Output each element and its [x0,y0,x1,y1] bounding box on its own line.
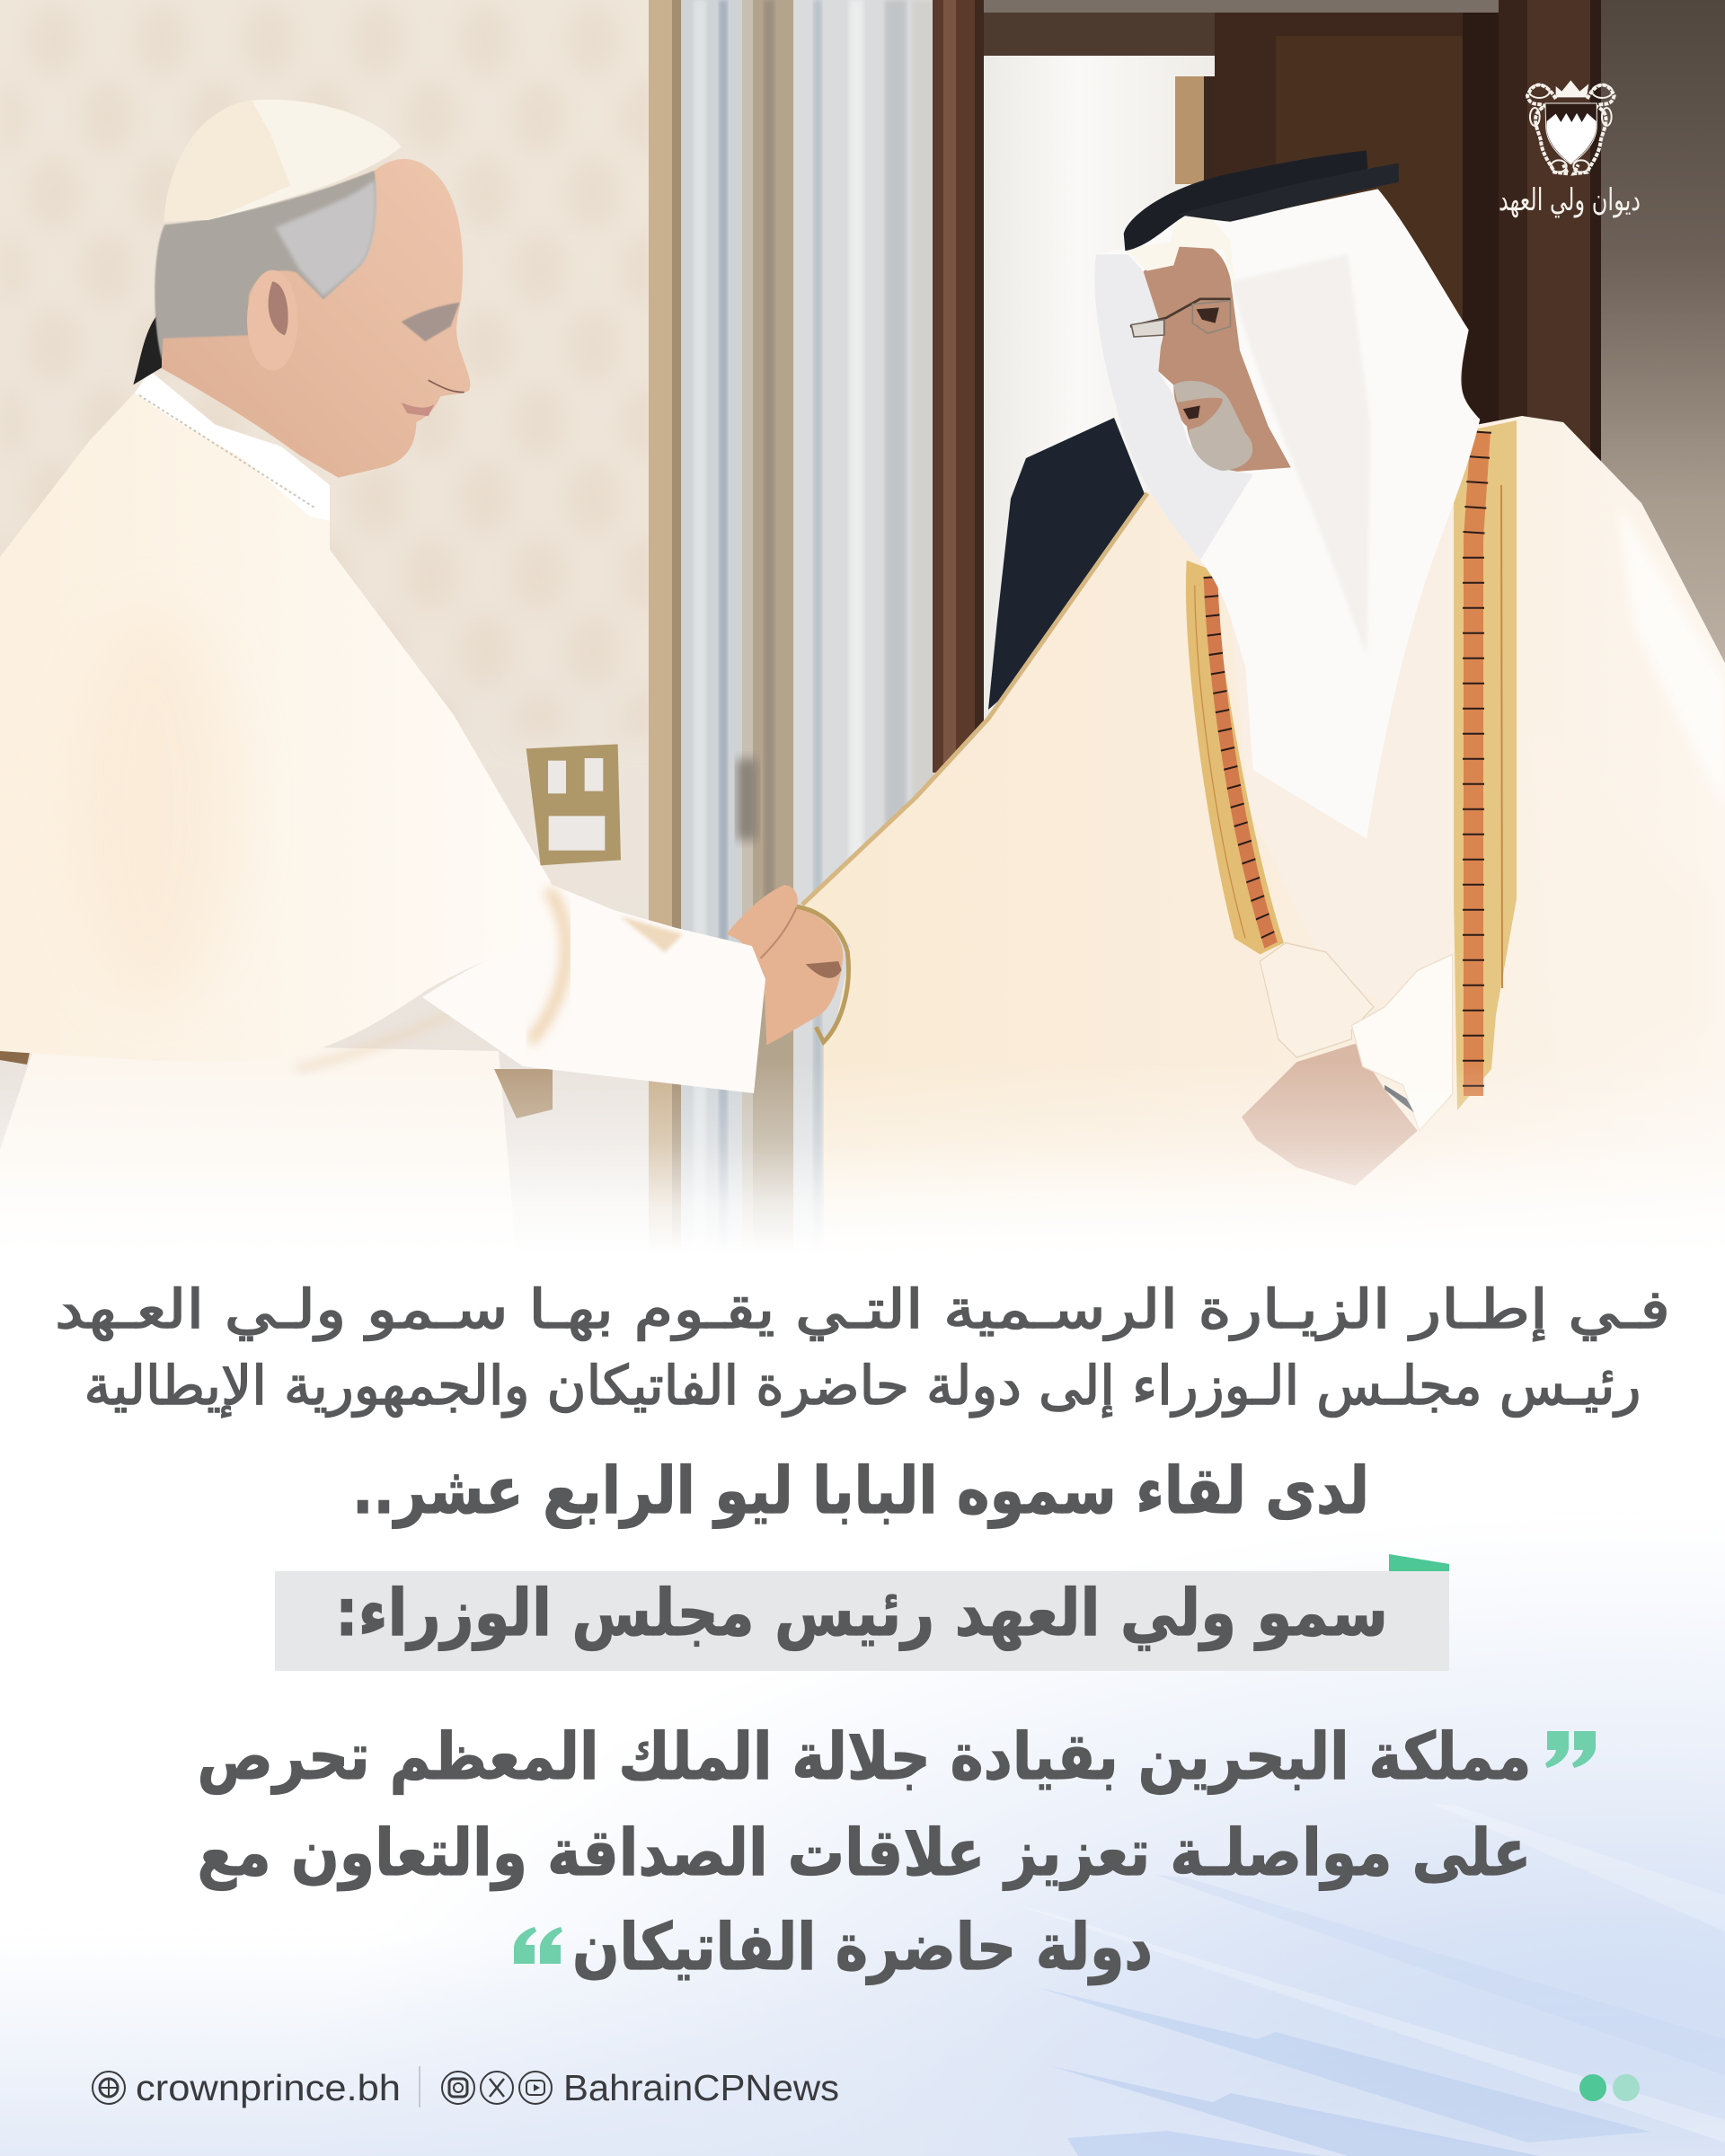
icon: instagram [442,2072,474,2104]
icon: globe [93,2072,125,2104]
closing quote mark icon at top right [1545,1731,1596,1768]
dark wooden door frame [933,0,985,773]
quotation block [198,1719,1596,1985]
website address: crownprince.bh [136,2067,401,2108]
footer contacts [93,2067,839,2108]
Pope's collar and cape [0,371,571,1258]
gold embroidered left band [1186,561,1284,954]
head with white ghutra and black agal [1094,151,1480,839]
quote line 2: على مواصلـة تعزيز علاقات الصداقة والتعاون مع [198,1815,1531,1891]
bright room through the doorway [984,54,1217,737]
clasped hands [726,885,848,1045]
fade of the photo into the white panel [0,1060,1725,1254]
man in dark suit behind [988,418,1159,710]
speaker label box [275,1554,1449,1671]
emblem: Crown Prince Court logo [1499,80,1641,218]
white lower panel [0,1254,1725,2156]
decorative blue gradient background [0,1437,1725,2156]
marble door surround [649,0,934,1258]
icon: YouTube [519,2072,552,2104]
light-switch plate [526,744,621,865]
opening quote mark icon at line end [514,1927,562,1964]
Pope's sleeve [422,883,765,1093]
robe of the Crown Prince [802,416,1725,1258]
icon: X [481,2072,513,2104]
grey box [275,1571,1449,1671]
social handle: BahrainCPNews [563,2067,839,2108]
speaker label text: سمو ولي العهد رئيس مجلس الوزراء: [335,1575,1388,1651]
heading: meeting with the Pope: لدى لقاء سموه البابا ليو الرابع عشر.. [352,1453,1369,1529]
quote line 1: مملكة البحرين بقيادة جلالة الملك المعظم تحرص [198,1719,1531,1795]
taupe wall at far right [1601,0,1725,719]
wall with damask wallpaper [0,0,660,1258]
head of the Pope [133,100,470,478]
gold embroidered right band [1454,420,1517,1110]
intro text line 2: رئيـس مجلـس الـوزراء إلى دولة حاضرة الفاتيكان والجمهورية الإيطالية [84,1355,1641,1418]
folded sleeves and clasped hand [1242,943,1453,1186]
intro text line 1: فـي إطـار الزيـارة الرسـمية التـي يقـوم بهـا سـمو ولـي العـهد [55,1278,1670,1341]
quote line 3: دولة حاضرة الفاتيكان [572,1909,1153,1985]
emblem caption: ديوان ولي العهد [1499,182,1641,218]
wreath and shield [1527,80,1614,173]
green corner tab [1389,1554,1449,1572]
wooden door and lintel [984,0,1604,647]
page indicator dots [1579,2074,1640,2101]
